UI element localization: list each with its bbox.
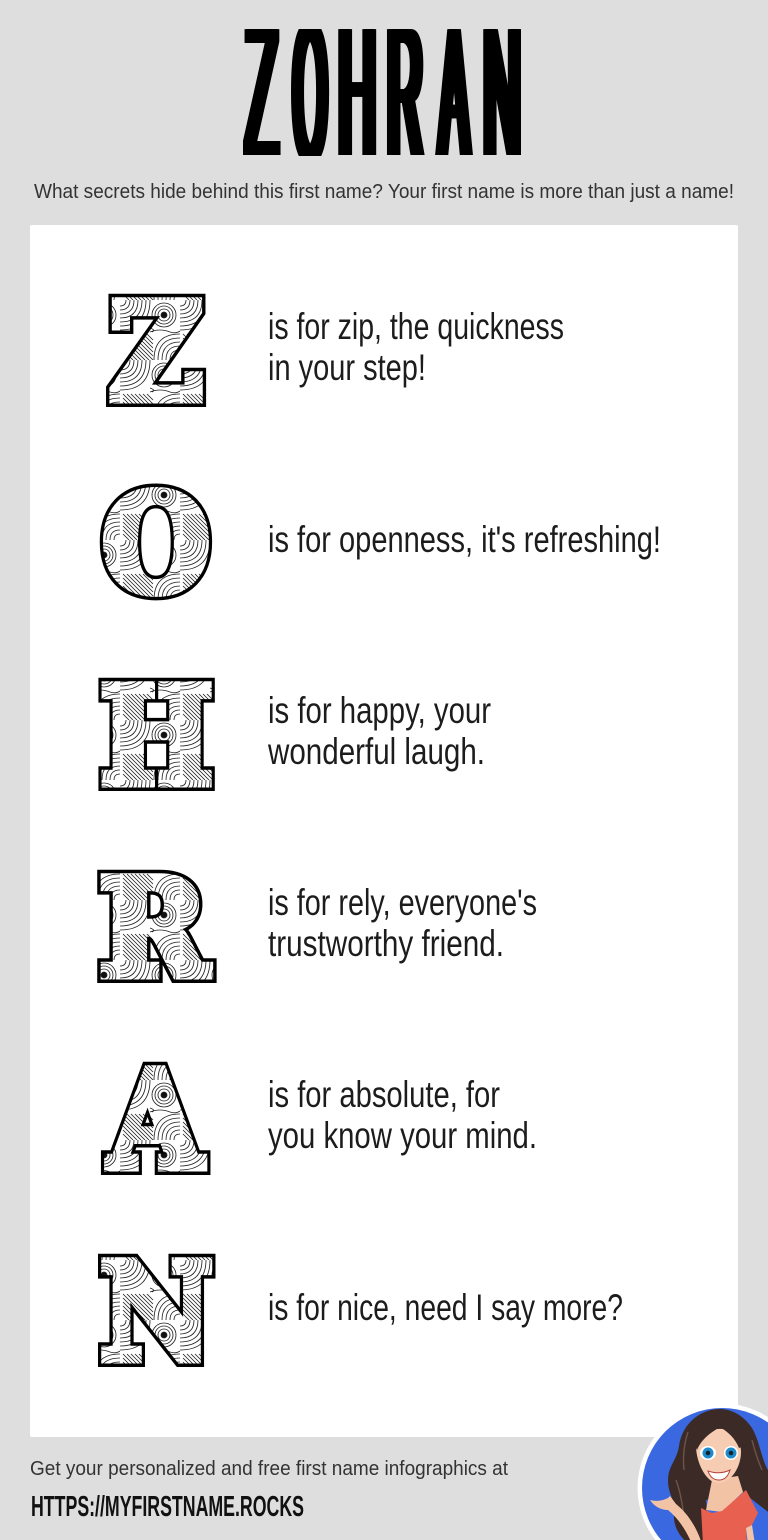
icon: letter A: A	[108, 1044, 203, 1198]
row: N	[100, 1236, 623, 1390]
panel: letters	[30, 225, 738, 1437]
footer text: Get your personalized and free first name infographics at	[30, 1458, 508, 1480]
row: H	[100, 660, 491, 814]
text: A meaning: you know your mind.	[268, 1115, 537, 1156]
text: H meaning: is for happy, your	[268, 690, 491, 731]
text: A meaning: is for absolute, for	[268, 1074, 500, 1115]
text: H meaning: wonderful laugh.	[267, 731, 485, 772]
icon: letter Z: Z	[110, 276, 202, 430]
row: Z	[110, 276, 564, 430]
text: N meaning: is for nice, need I say more?	[268, 1287, 623, 1328]
icon: letter O: O	[102, 467, 210, 622]
icon: letter H: H	[100, 660, 212, 814]
text: Z meaning	[268, 306, 564, 388]
icon: letter N: N	[100, 1236, 212, 1390]
footer url: HTTPS://MYFIRSTNAME.ROCKS	[31, 1491, 304, 1523]
row: R	[100, 852, 537, 1006]
title	[243, 29, 521, 156]
text: R meaning: trustworthy friend.	[268, 923, 504, 964]
text: R meaning: is for rely, everyone's	[268, 882, 537, 923]
text: O meaning: is for openness, it's refreshing!	[268, 519, 661, 560]
icon: letter N: N	[100, 1236, 212, 1390]
icon: letter A: A	[108, 1044, 203, 1198]
icon: letter R: R	[100, 852, 209, 1006]
icon: letter H: H	[100, 660, 212, 814]
row: A	[108, 1044, 537, 1198]
icon: avatar	[638, 1404, 768, 1540]
text: Z meaning: is for zip, the quickness	[268, 306, 564, 347]
text: R meaning	[268, 882, 537, 964]
text: H meaning	[267, 690, 491, 772]
row: O	[102, 467, 661, 622]
text: A meaning	[268, 1074, 537, 1156]
icon: letter Z: Z	[110, 276, 202, 430]
subtitle: What secrets hide behind this first name? Your first name is more than just a name!	[34, 181, 734, 203]
text: Z meaning: in your step!	[268, 347, 426, 388]
icon: letter O: O	[102, 467, 210, 622]
icon: letter R: R	[100, 852, 209, 1006]
